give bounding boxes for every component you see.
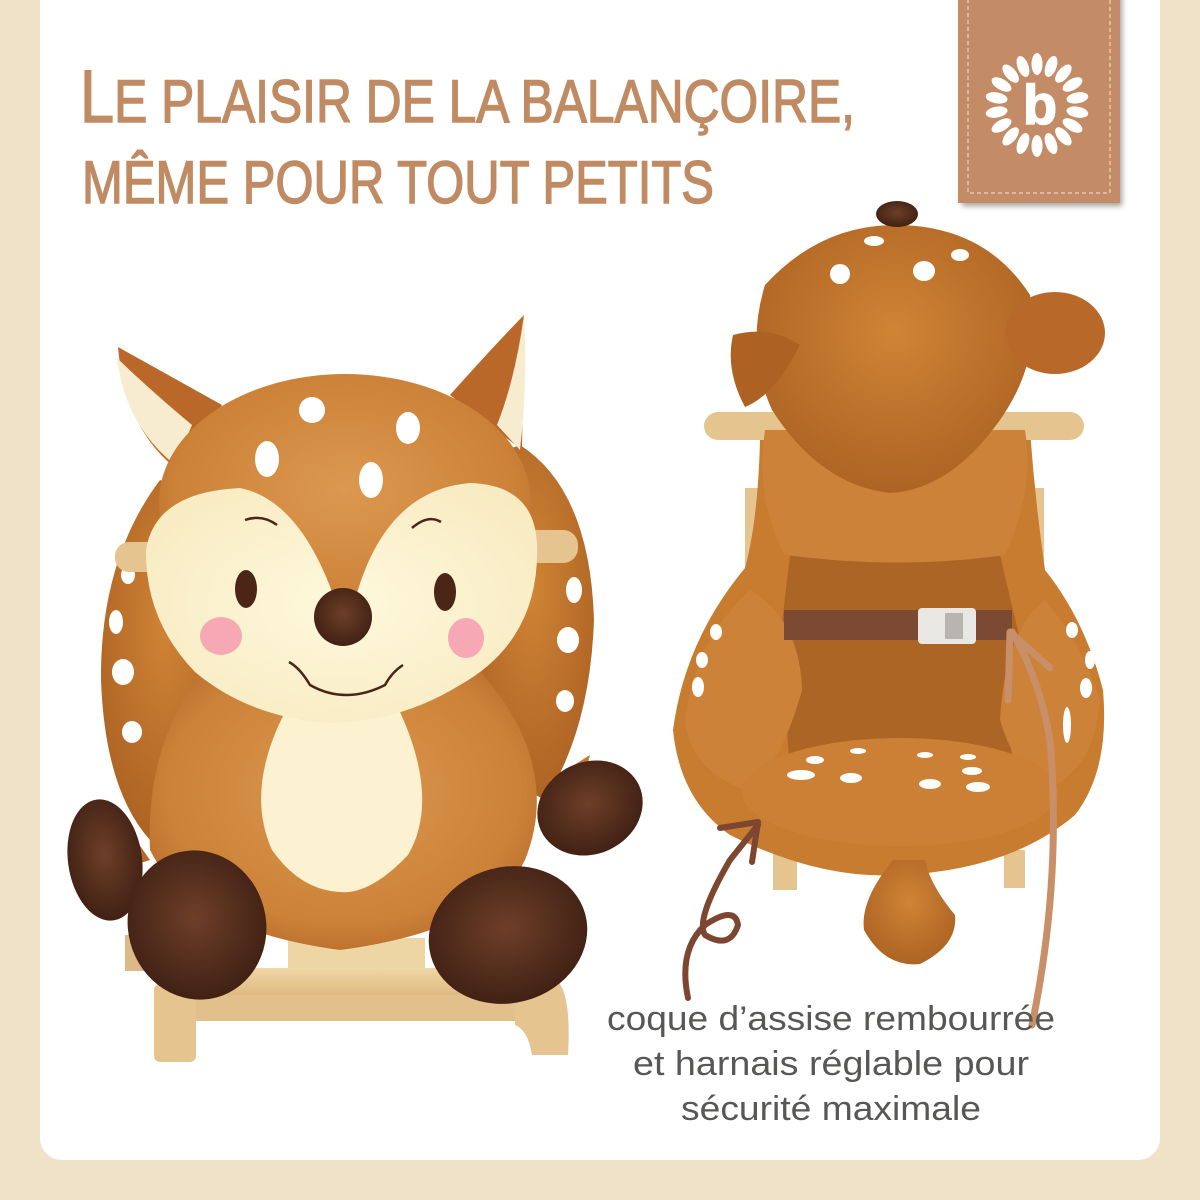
back body with spots xyxy=(101,445,594,870)
belly xyxy=(261,712,422,892)
title xyxy=(80,55,855,216)
seat cushion xyxy=(742,738,1058,846)
caption text: sécurité maximale xyxy=(681,1090,981,1128)
front hooves xyxy=(111,835,283,1015)
harness strap xyxy=(784,608,1012,644)
photo: rocking deer front view xyxy=(60,315,658,1062)
nose xyxy=(314,588,372,646)
inner back xyxy=(780,555,1020,770)
neck and back xyxy=(762,430,1028,562)
title: LE PLAISIR DE LA BALANÇOIRE, xyxy=(80,55,855,138)
photo: deer seat rear/top view xyxy=(673,201,1105,964)
caption text: et harnais réglable pour xyxy=(633,1045,1029,1083)
face cream xyxy=(146,483,537,723)
mouth xyxy=(289,662,403,695)
tuft xyxy=(876,201,918,227)
spots on head xyxy=(255,397,420,498)
arm rests xyxy=(685,590,802,790)
spots xyxy=(830,236,969,284)
legs xyxy=(773,850,797,890)
title: MÊME POUR TOUT PETITS xyxy=(82,149,714,216)
cheeks xyxy=(200,617,242,655)
seat shell xyxy=(673,430,1104,876)
rocker base xyxy=(125,935,569,1062)
hooves rear xyxy=(60,794,150,926)
logo tag xyxy=(958,0,1122,206)
eyes xyxy=(235,570,456,611)
body xyxy=(150,660,537,950)
caption text: coque d’assise rembourrée xyxy=(607,1000,1055,1038)
handle xyxy=(704,412,1084,440)
icon: flower logo xyxy=(985,53,1089,157)
ears xyxy=(731,332,800,407)
caption text xyxy=(607,1000,1055,1128)
arrow: to harness xyxy=(1008,632,1053,1025)
ears xyxy=(117,315,525,470)
icon: flower logo: b xyxy=(1023,73,1057,136)
head xyxy=(159,374,531,630)
head from behind xyxy=(756,225,1033,493)
handle xyxy=(115,542,175,572)
tail xyxy=(864,860,955,964)
arrow: to seat shell xyxy=(685,822,758,998)
